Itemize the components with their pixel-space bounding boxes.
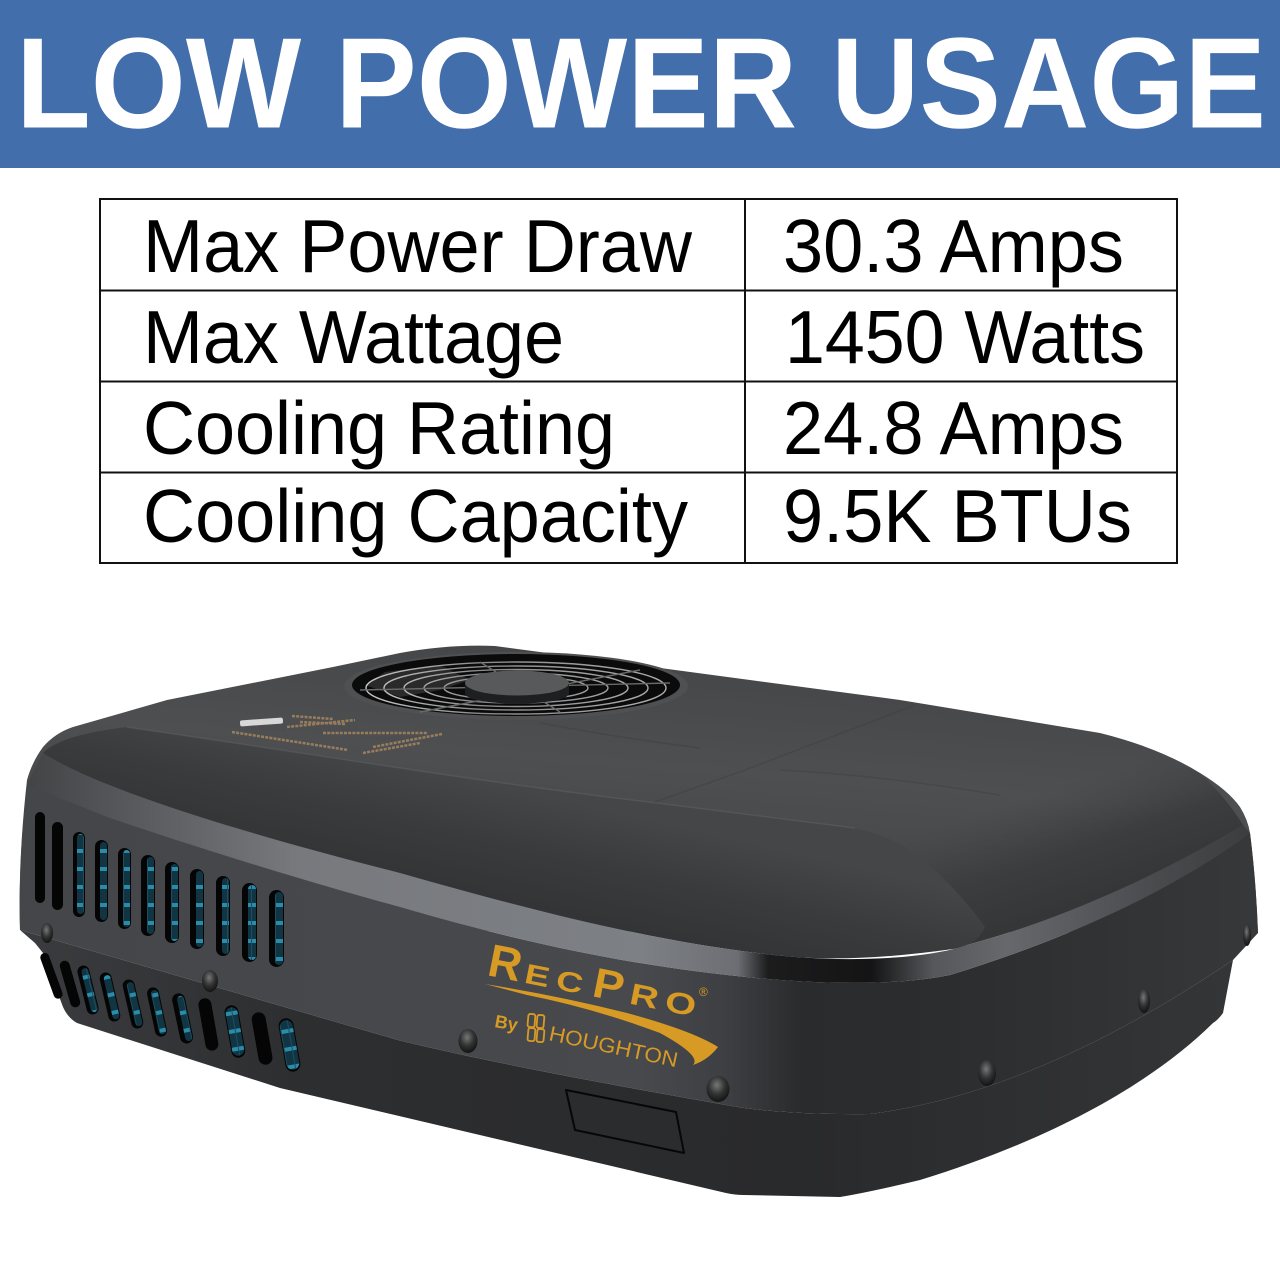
- top surface seams: [540, 705, 1000, 802]
- row: cooling capacity: 9.5K BTUs: [783, 474, 1132, 558]
- logo wordmark: E: [522, 957, 553, 993]
- logo wordmark: R: [627, 978, 662, 1016]
- fan: [344, 652, 688, 720]
- rim highlight: [27, 753, 1250, 983]
- row: max power draw: Max Power Draw: [143, 204, 693, 288]
- RecPro logo: HOUGHTON: [547, 1022, 680, 1072]
- logo wordmark: P: [589, 960, 628, 1011]
- row: cooling rating: [143, 386, 1124, 470]
- row: cooling capacity: Cooling Capacity: [143, 474, 688, 558]
- fan surround: [344, 652, 688, 720]
- fan hub: [465, 683, 569, 704]
- row: max power draw: 30.3 Amps: [783, 204, 1124, 288]
- fan recess: [352, 654, 680, 716]
- row: max wattage: Max Wattage: [143, 295, 564, 379]
- fan blades: [365, 665, 470, 697]
- top surface: [20, 646, 1258, 933]
- right corner shading: [855, 733, 1243, 949]
- air conditioner unit: [20, 646, 1258, 1197]
- logo wordmark: O: [662, 985, 699, 1023]
- title banner: [0, 0, 1280, 168]
- skirt: [20, 930, 1233, 1197]
- logo wordmark: C: [553, 964, 586, 1000]
- ridge highlight: [127, 727, 855, 828]
- logo swoosh: [485, 984, 718, 1065]
- logo by houghton: By: [493, 1011, 519, 1035]
- row: cooling rating: 24.8 Amps: [783, 386, 1124, 470]
- access hatch: [566, 1090, 684, 1153]
- lower vent slots: [39, 952, 302, 1073]
- row: max power draw: [143, 204, 1124, 288]
- specifications table: [100, 199, 1177, 563]
- logo trademark: ®: [699, 985, 708, 999]
- fan grille: [360, 662, 670, 714]
- logo wordmark: R: [484, 934, 527, 991]
- row: max wattage: [143, 295, 1145, 379]
- warning label: [232, 716, 442, 753]
- row: cooling rating: Cooling Rating: [143, 386, 615, 470]
- mounting screws: [41, 923, 1251, 1102]
- logo wordmark: [484, 934, 702, 1026]
- RecPro logo: [484, 934, 718, 1072]
- row: cooling capacity: [143, 474, 1132, 558]
- front slope: [43, 727, 985, 958]
- row: max wattage: 1450 Watts: [785, 295, 1145, 379]
- top vent slots: [35, 812, 284, 967]
- front panel: [20, 785, 1258, 1114]
